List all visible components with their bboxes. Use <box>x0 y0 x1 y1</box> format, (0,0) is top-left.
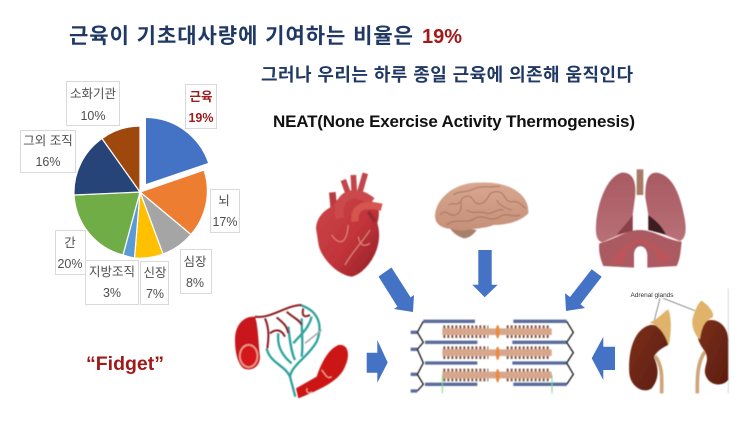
label: heart: 8% <box>186 276 204 290</box>
label: heart: 심장 <box>183 255 207 269</box>
icon: lungs <box>596 169 686 268</box>
M lines <box>496 325 500 338</box>
slice: fat tissue 3% <box>123 192 140 258</box>
arrow: brain to muscle <box>472 250 498 297</box>
pie chart <box>74 118 208 258</box>
label: brain <box>210 190 240 232</box>
slice: other tissue 16% <box>74 138 140 195</box>
label: muscle: 근육 <box>189 90 213 104</box>
icon: blood vessels and capillaries <box>235 305 348 398</box>
label: kidney: 7% <box>146 287 164 301</box>
label: digestive organs: 소화기관 <box>70 87 116 101</box>
slice: digestive organs 10% <box>102 126 140 192</box>
slice: heart 8% <box>140 192 191 254</box>
label: fat tissue: 지방조직 <box>89 265 135 279</box>
label: brain: 17% <box>212 215 238 229</box>
label: muscle <box>186 84 216 128</box>
slice: liver 20% <box>74 192 140 255</box>
Z lines <box>417 321 573 391</box>
icon: sarcomere muscle fibers <box>411 321 573 393</box>
label: liver: 20% <box>57 257 83 271</box>
title: muscle contribution: 19% <box>422 26 462 48</box>
label: brain: 뇌 <box>218 194 230 208</box>
arrow: vessels to muscle <box>367 340 388 383</box>
label: heart <box>180 250 212 294</box>
arrow: heart to muscle <box>378 268 414 312</box>
icon: heart <box>316 173 382 277</box>
label: muscle: 19% <box>188 111 214 125</box>
label: other tissue: 그외 조직 <box>23 134 73 148</box>
label: kidney <box>140 262 168 304</box>
thick filaments <box>443 332 551 375</box>
slice: brain 17% <box>140 170 207 234</box>
label: liver <box>56 230 86 274</box>
label: kidney: 신장 <box>143 266 167 280</box>
label: digestive organs <box>66 82 120 126</box>
green markers <box>442 375 552 393</box>
label: other tissue: 16% <box>35 155 61 169</box>
adrenal glands caption: Adrenal glands <box>630 292 674 299</box>
arrow: lungs to muscle <box>565 269 602 311</box>
label: other tissue <box>20 130 76 172</box>
slice: muscle 19% <box>146 118 208 184</box>
label: fat tissue <box>86 260 138 304</box>
heading: NEAT: NEAT(None Exercise Activity Thermogenesis) <box>273 112 635 131</box>
icon: kidneys with adrenal glands <box>629 288 728 393</box>
icon: brain <box>435 182 528 238</box>
slice: kidney 7% <box>134 192 163 258</box>
label: fat tissue: 3% <box>103 286 121 300</box>
label: liver: 간 <box>64 236 76 250</box>
subtitle: 그러나 우리는 하루 종일 근육에 의존해 움직인다 <box>261 65 633 85</box>
thin filaments <box>411 321 567 391</box>
Fidget label: “Fidget” <box>86 353 164 375</box>
label: digestive organs: 10% <box>80 109 106 123</box>
arrow: kidneys to muscle <box>592 337 615 380</box>
title: muscle contribution: 근육이 기초대사량에 기여하는 비율은 <box>69 25 413 48</box>
